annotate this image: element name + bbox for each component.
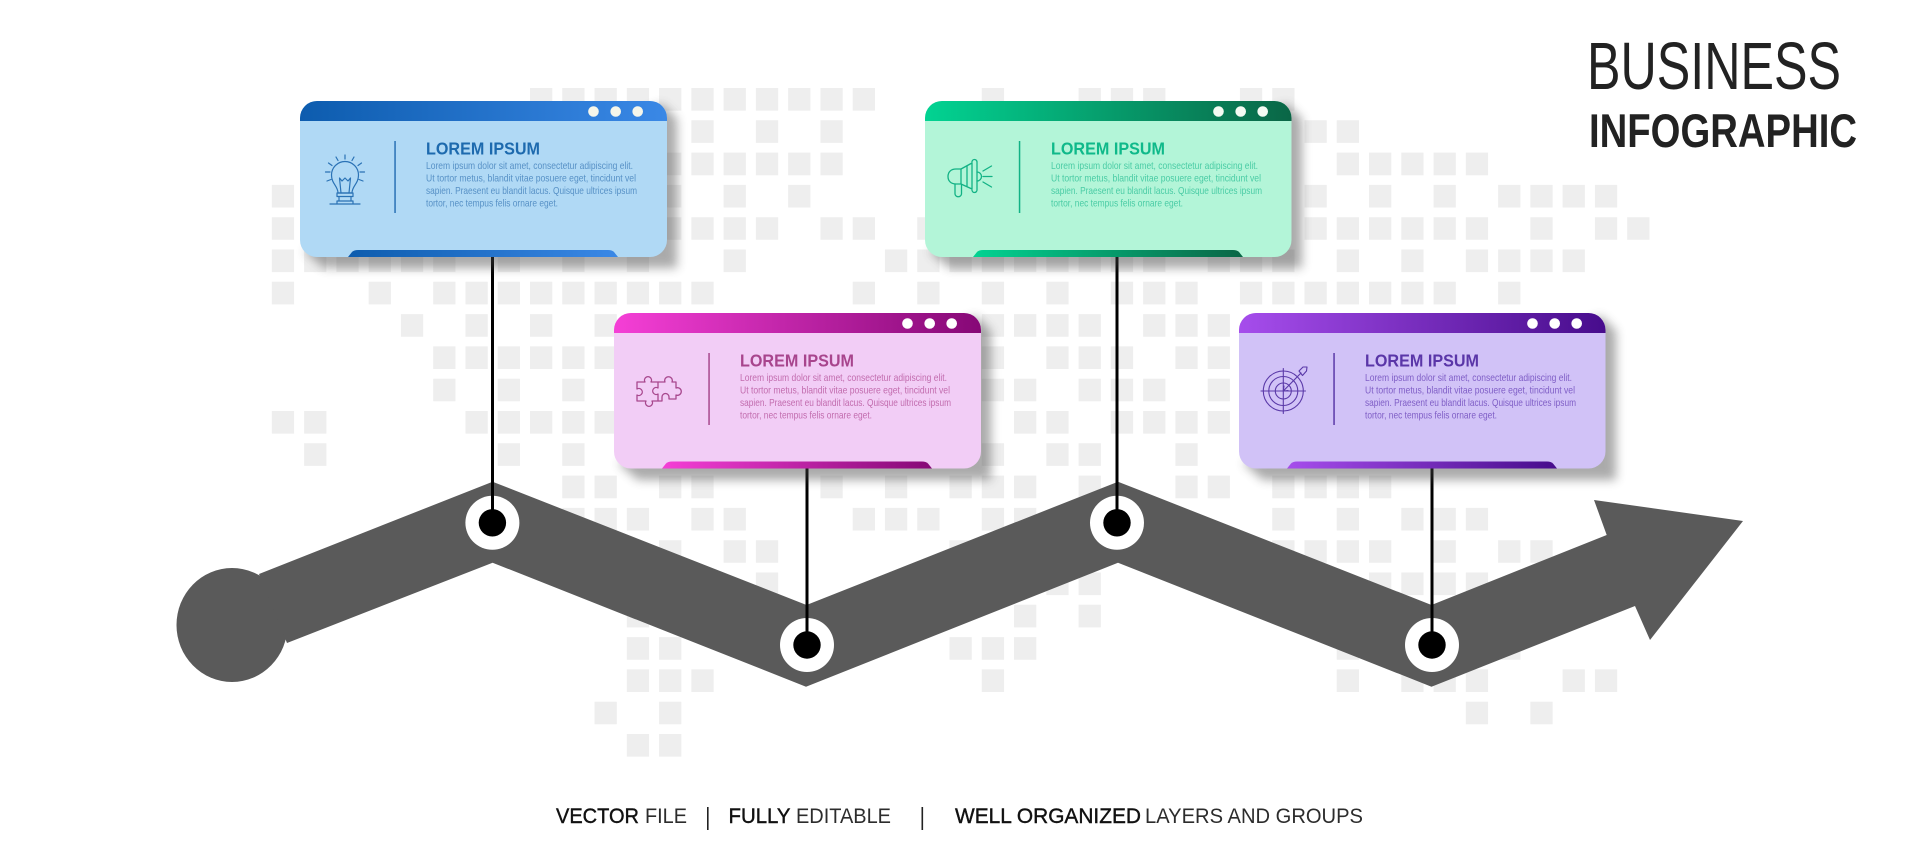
marker 2 with connector	[780, 466, 834, 672]
text block	[740, 373, 951, 422]
icon: megaphone	[948, 160, 992, 197]
text block: Lorem ipsum dolor sit amet, consectetur adipiscing elit.	[426, 161, 633, 172]
footer tagline: FULLY	[728, 805, 790, 828]
title	[1587, 30, 1857, 157]
text block: Lorem ipsum dolor sit amet, consectetur adipiscing elit.	[1365, 373, 1572, 384]
zigzag timeline arrow	[176, 482, 1743, 687]
heading: LOREM IPSUM	[1365, 350, 1479, 370]
text block: tortor, nec tempus felis ornare eget.	[1051, 198, 1183, 210]
marker 4 with connector	[1405, 466, 1459, 672]
text block	[426, 161, 637, 210]
text block: tortor, nec tempus felis ornare eget.	[740, 410, 872, 422]
icon: target with arrow	[1261, 367, 1307, 414]
text block: sapien. Praesent eu blandit lacus. Quisque ultrices ipsum	[1365, 398, 1576, 409]
marker 1 with connector	[465, 255, 519, 550]
text block: Lorem ipsum dolor sit amet, consectetur adipiscing elit.	[1051, 161, 1258, 172]
panel: green card	[925, 101, 1302, 268]
text block: sapien. Praesent eu blandit lacus. Quisque ultrices ipsum	[426, 186, 637, 197]
text block: Ut tortor metus, blandit vitae posuere eget, tincidunt vel	[740, 386, 950, 396]
footer tagline: VECTOR	[556, 805, 639, 828]
text block: Ut tortor metus, blandit vitae posuere eget, tincidunt vel	[426, 174, 636, 184]
text block: Ut tortor metus, blandit vitae posuere eget, tincidunt vel	[1051, 174, 1261, 184]
text block: tortor, nec tempus felis ornare eget.	[426, 198, 558, 210]
icon: light bulb	[326, 155, 364, 204]
heading: LOREM IPSUM	[426, 138, 540, 158]
text block: tortor, nec tempus felis ornare eget.	[1365, 410, 1497, 422]
text block	[1051, 161, 1262, 210]
footer tagline: EDITABLE	[796, 805, 891, 828]
heading: LOREM IPSUM	[1051, 138, 1165, 158]
panel: purple card	[1239, 313, 1616, 480]
footer tagline: LAYERS AND GROUPS	[1145, 805, 1363, 828]
panel: pink card	[614, 313, 991, 480]
text block: sapien. Praesent eu blandit lacus. Quisque ultrices ipsum	[740, 398, 951, 409]
icon: puzzle pieces	[637, 377, 681, 406]
marker 3 with connector	[1090, 255, 1144, 550]
text block: Lorem ipsum dolor sit amet, consectetur adipiscing elit.	[740, 373, 947, 384]
footer tagline: WELL ORGANIZED	[955, 805, 1141, 828]
heading: LOREM IPSUM	[740, 350, 854, 370]
text block: Ut tortor metus, blandit vitae posuere eget, tincidunt vel	[1365, 386, 1575, 396]
text block: sapien. Praesent eu blandit lacus. Quisque ultrices ipsum	[1051, 186, 1262, 197]
title: BUSINESS	[1587, 30, 1841, 104]
text block	[1365, 373, 1576, 422]
footer tagline	[556, 805, 1363, 830]
footer tagline: FILE	[645, 805, 687, 828]
panel: blue card	[300, 101, 677, 268]
title: INFOGRAPHIC	[1589, 104, 1857, 157]
